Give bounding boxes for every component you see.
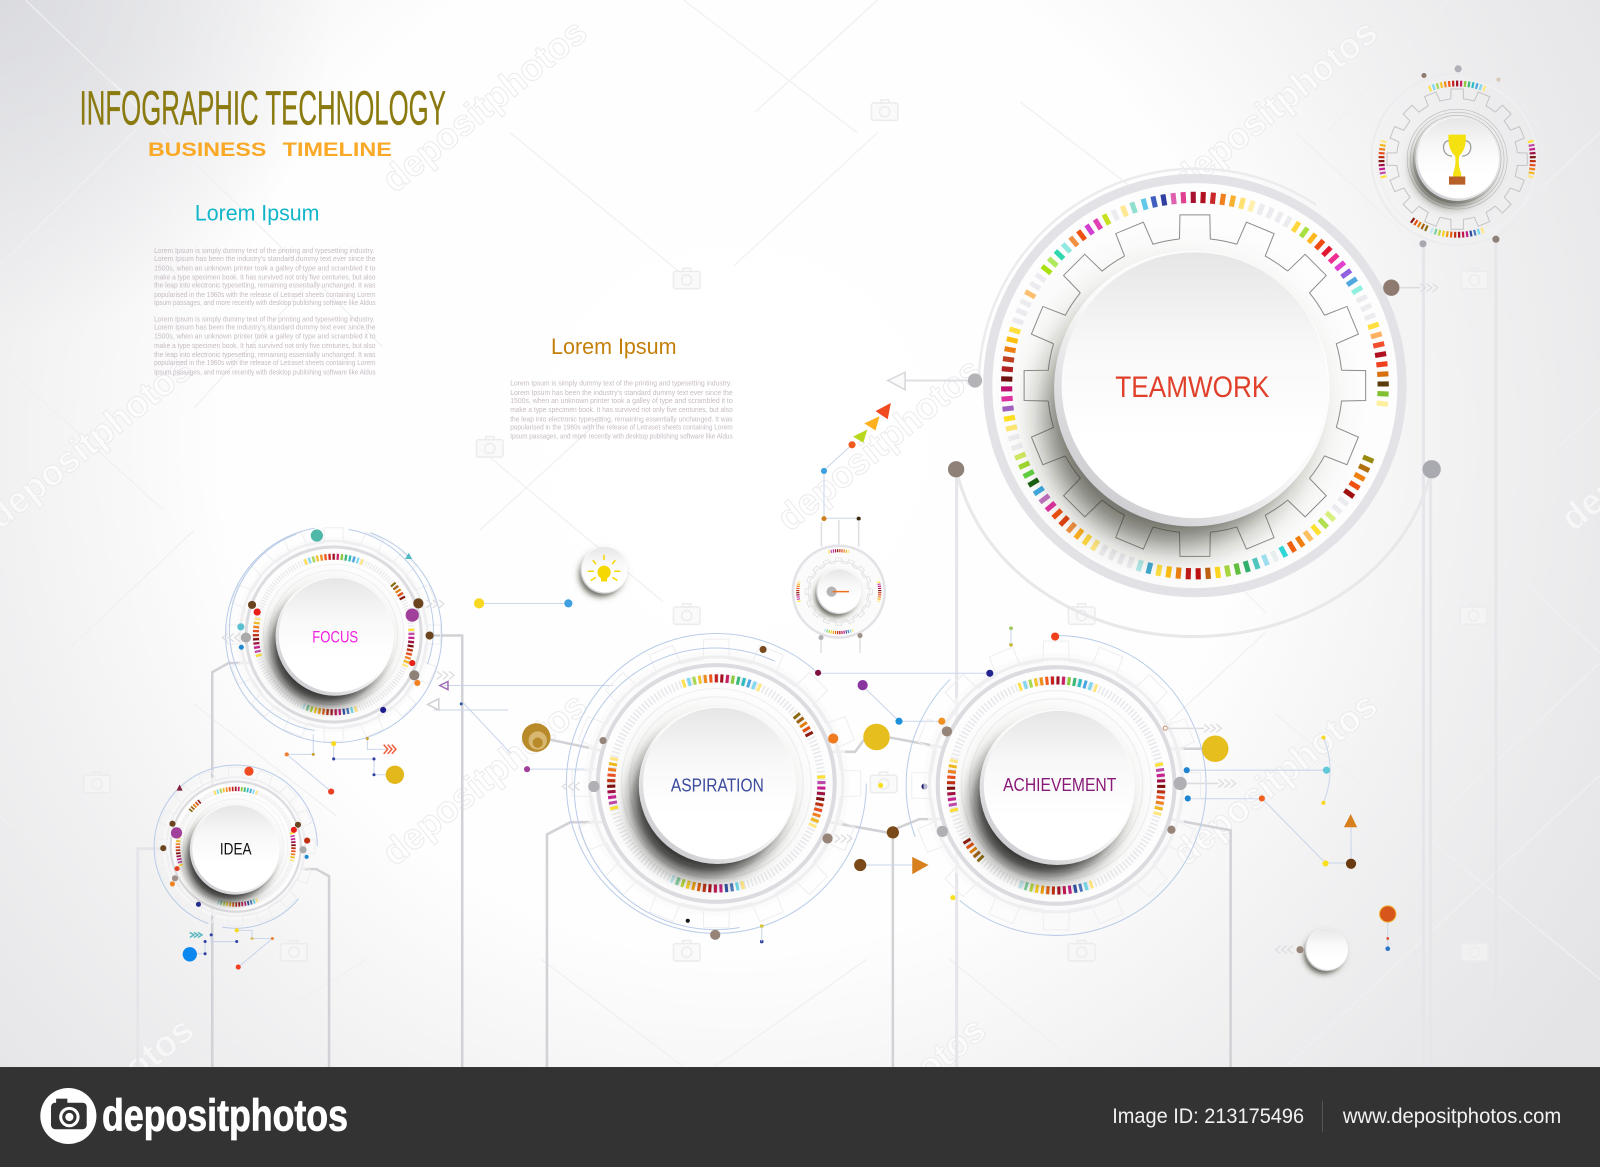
gear outline bbox=[1021, 212, 1369, 559]
footer logo bbox=[40, 1088, 348, 1144]
node: aspiration dots bbox=[522, 646, 929, 943]
text block: left paragraphs: 1500s, when an unknown printer took a galley of type and scrambled it to bbox=[154, 333, 376, 341]
subtitle bbox=[148, 139, 392, 161]
text block: left paragraphs: Ipsum passages, and more recently with desktop publishing software like Aldus bbox=[154, 368, 376, 376]
footer logo: depositphotos bbox=[102, 1089, 348, 1140]
panel: bulb circle bbox=[578, 547, 628, 597]
text block: left paragraphs: Lorem Ipsum is simply dummy text of the printing and typesetting industry. bbox=[154, 247, 375, 255]
icon: orange triangle bbox=[912, 857, 929, 874]
text block: left paragraphs: Lorem Ipsum has been the industry's standard dummy text ever since the bbox=[154, 255, 376, 263]
circuit: vertical trunk lines bbox=[138, 241, 1496, 1071]
heading: centre lorem ipsum: Lorem Ipsum bbox=[551, 334, 677, 359]
icon: light bulb bbox=[588, 555, 620, 581]
text block: centre paragraph bbox=[510, 380, 733, 441]
text block: centre paragraph: make a type specimen book. It has survived not only five centuries, but also bbox=[510, 406, 733, 414]
panel: target circle bbox=[793, 546, 885, 638]
node: teamwork gear dots and arrows bbox=[888, 280, 1441, 478]
watermark: depositphotos tile 1: depositphotos bbox=[374, 11, 594, 200]
coloured tick ring bbox=[1001, 192, 1389, 579]
footer url: www.depositphotos.com bbox=[1342, 1104, 1561, 1128]
text block: centre paragraph: 1500s, when an unknown printer took a galley of type and scrambled it to bbox=[510, 397, 733, 405]
label: focus: FOCUS bbox=[312, 629, 358, 647]
text block: left paragraphs bbox=[154, 247, 376, 376]
circuit: thin connector lines bbox=[190, 445, 1388, 967]
node: achievement dots bbox=[937, 627, 1357, 900]
text block: left paragraphs: make a type specimen book. It has survived not only five centuries, but also bbox=[154, 274, 376, 282]
text block: centre paragraph: Lorem Ipsum has been the industry's standard dummy text ever since the bbox=[510, 389, 733, 397]
footer bar bbox=[0, 1067, 1600, 1167]
text block: left paragraphs: the leap into electronic typesetting, remaining essentially unchanged. It was bbox=[154, 351, 376, 359]
text block: centre paragraph: popularised in the 1960s with the release of Letraset sheets containing Lorem bbox=[510, 423, 733, 431]
panel: small blank disc bbox=[1276, 928, 1348, 974]
panel: trophy gear bbox=[1371, 73, 1543, 245]
node: focus lower circuit bbox=[285, 737, 404, 795]
text block: left paragraphs: Ipsum passages, and more recently with desktop publishing software like Aldus bbox=[154, 299, 376, 307]
text block: centre paragraph: Lorem Ipsum is simply dummy text of the printing and typesetting industry. bbox=[510, 380, 732, 388]
watermark: depositphotos tile 5: depositphotos bbox=[769, 350, 989, 539]
footer image id: Image ID: 213175496 bbox=[1112, 1104, 1304, 1128]
text block: left paragraphs: popularised in the 1960s with the release of Letraset sheets containing Lorem bbox=[154, 359, 376, 367]
text block: centre paragraph: the leap into electronic typesetting, remaining essentially unchanged. It was bbox=[510, 415, 733, 423]
text block: left paragraphs: the leap into electronic typesetting, remaining essentially unchanged. It was bbox=[154, 282, 376, 290]
text block: left paragraphs: Lorem Ipsum is simply dummy text of the printing and typesetting industry. bbox=[154, 315, 375, 323]
label: teamwork: TEAMWORK bbox=[1115, 371, 1270, 404]
icon: target bbox=[827, 587, 849, 597]
heading: left lorem ipsum: Lorem Ipsum bbox=[195, 200, 319, 225]
subtitle: TIMELINE bbox=[283, 139, 392, 161]
circuit: target connectors and rising triangles bbox=[818, 403, 891, 653]
label: idea: IDEA bbox=[220, 840, 252, 858]
watermark: depositphotos tile 4: depositphotos bbox=[374, 684, 594, 873]
panel: achievement circle bbox=[906, 636, 1206, 935]
label: achievement: ACHIEVEMENT bbox=[1003, 774, 1116, 795]
disc bbox=[1042, 251, 1330, 547]
icon: up triangle bbox=[1344, 814, 1357, 827]
title: INFOGRAPHIC TECHNOLOGY bbox=[80, 82, 446, 135]
text block: left paragraphs: make a type specimen book. It has survived not only five centuries, but also bbox=[154, 342, 376, 350]
label: aspiration: ASPIRATION bbox=[671, 775, 764, 796]
icon: trophy bbox=[1443, 135, 1471, 185]
panel: large orbit arc bbox=[956, 169, 1432, 637]
text block: centre paragraph: Ipsum passages, and more recently with desktop publishing software like Aldus bbox=[510, 433, 733, 441]
subtitle: BUSINESS bbox=[148, 139, 266, 161]
node: idea lower circuit bbox=[183, 928, 274, 970]
text block: left paragraphs: 1500s, when an unknown printer took a galley of type and scrambled it to bbox=[154, 264, 376, 272]
panel: focus circle bbox=[213, 512, 450, 748]
node: focus dots bbox=[222, 529, 572, 713]
panel: teamwork gear bbox=[988, 179, 1402, 593]
panel: idea circle bbox=[131, 742, 340, 951]
node: trophy dots bbox=[1419, 65, 1501, 247]
text block: left paragraphs: popularised in the 1960s with the release of Letraset sheets containing Lorem bbox=[154, 291, 376, 299]
watermark: depositphotos tile 6: depositphotos bbox=[1165, 684, 1385, 873]
watermark camera icons bbox=[84, 100, 1488, 961]
panel: aspiration circle bbox=[552, 626, 878, 952]
watermark: depositphotos tile 2: depositphotos bbox=[1165, 11, 1385, 200]
node: idea dots bbox=[160, 767, 310, 907]
text block: left paragraphs: Lorem Ipsum has been the industry's standard dummy text ever since the bbox=[154, 323, 376, 331]
node: orange circle with dots bbox=[1380, 906, 1396, 951]
